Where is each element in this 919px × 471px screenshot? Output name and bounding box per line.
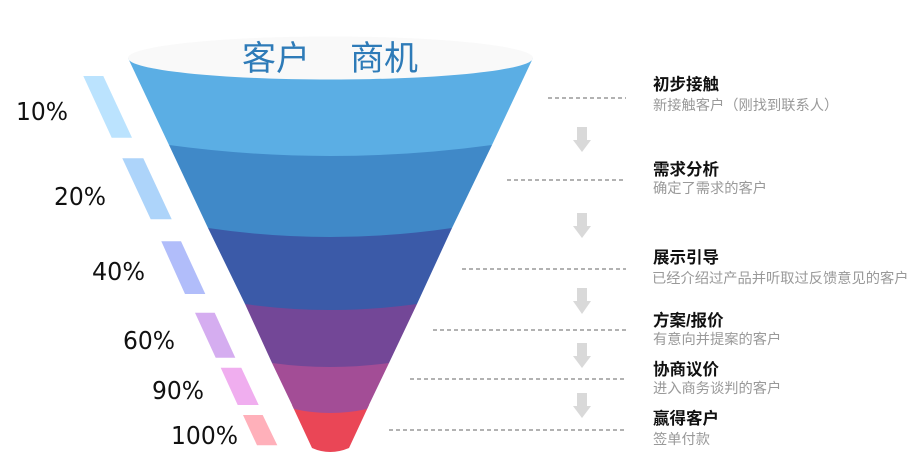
rate label 60%: 60% xyxy=(123,326,175,355)
rate label 90%: 90% xyxy=(152,376,204,405)
funnel band: 方案/报价 xyxy=(245,304,417,367)
leader lines xyxy=(389,98,626,430)
step: 赢得客户: 赢得客户 xyxy=(653,408,719,428)
step: 需求分析: 需求分析 xyxy=(653,159,719,179)
step: 赢得客户: 签单付款 xyxy=(653,431,710,448)
conversion rates column xyxy=(16,76,277,450)
rate bar 40% xyxy=(161,241,205,294)
step: 初步接触: 初步接触 xyxy=(653,74,720,94)
arrow: step 2 to step 3 xyxy=(573,213,591,238)
rate bar 20% xyxy=(122,158,172,219)
funnel band: 协商议价 xyxy=(272,363,389,413)
step: 初步接触 xyxy=(653,74,838,114)
rate bar 100% xyxy=(243,415,277,445)
step: 展示引导: 已经介绍过产品并听取过反馈意见的客户 xyxy=(652,269,909,287)
rate label 20%: 20% xyxy=(54,182,106,211)
step: 展示引导 xyxy=(652,248,909,287)
funnel band: 展示引导 xyxy=(208,228,452,310)
step: 方案/报价: 方案/报价 xyxy=(653,310,724,330)
arrow: step 3 to step 4 xyxy=(573,288,591,314)
funnel rim ellipse xyxy=(128,36,533,80)
rate label 10%: 10% xyxy=(16,97,68,126)
step: 初步接触: 新接触客户（刚找到联系人） xyxy=(653,97,838,114)
arrow: step 1 to step 2 xyxy=(573,127,591,152)
funnel chart xyxy=(128,36,533,452)
step: 协商议价: 协商议价 xyxy=(653,360,720,379)
funnel heading: 商机: 商机 xyxy=(350,40,418,78)
rate bar 10% xyxy=(83,76,132,138)
funnel band: 初步接触 xyxy=(128,58,533,156)
step: 需求分析: 确定了需求的客户 xyxy=(653,180,767,197)
step: 协商议价: 进入商务谈判的客户 xyxy=(653,380,781,397)
funnel band: 需求分析 xyxy=(169,145,492,237)
rate bar 90% xyxy=(221,368,259,405)
funnel heading: 客户: 客户 xyxy=(242,40,310,78)
arrow: step 5 to step 6 xyxy=(573,393,591,418)
step: 赢得客户 xyxy=(653,408,719,448)
rate label 40%: 40% xyxy=(92,257,145,286)
funnel band: 赢得客户 xyxy=(292,405,369,452)
step: 需求分析 xyxy=(653,159,767,197)
arrow: step 4 to step 5 xyxy=(573,343,591,368)
step: 方案/报价 xyxy=(653,310,781,348)
step: 协商议价 xyxy=(653,360,781,397)
rate bar 60% xyxy=(195,313,235,358)
rate label 100%: 100% xyxy=(171,421,238,450)
step: 展示引导: 展示引导 xyxy=(653,248,719,267)
step: 方案/报价: 有意向并提案的客户 xyxy=(653,330,781,348)
